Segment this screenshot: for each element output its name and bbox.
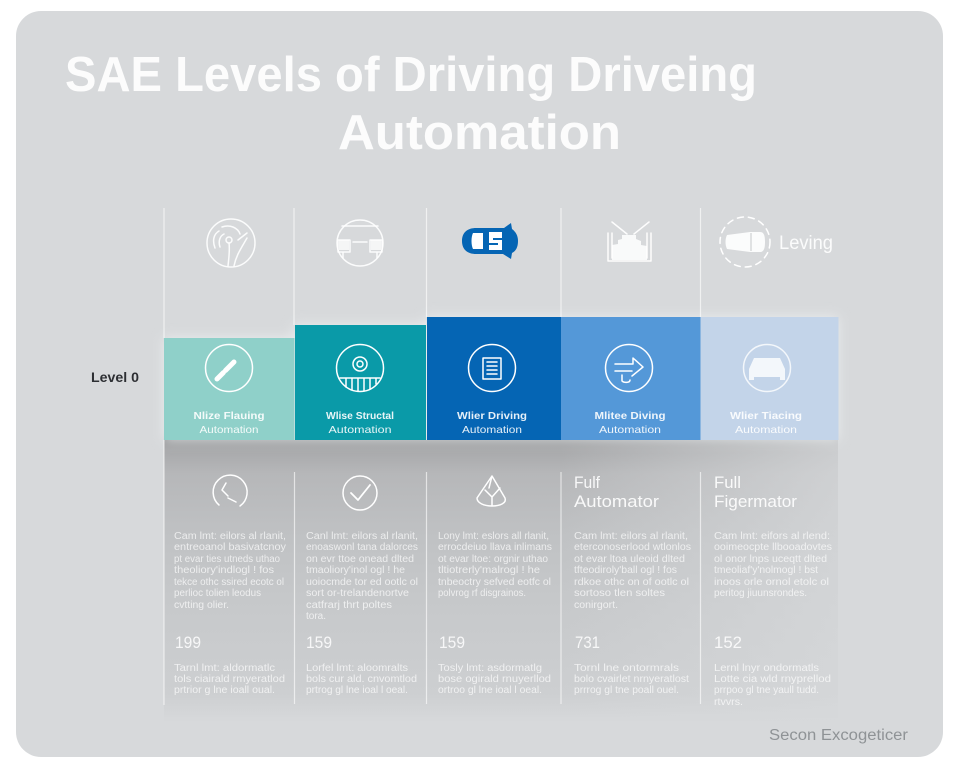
text column: level 0: tekce othc ssired ecotc ol xyxy=(174,577,284,588)
column 3 heading xyxy=(574,473,659,511)
text column: level 4: inoos orle ornol etolc ol xyxy=(714,577,829,588)
text column: level 3: bolo cvairlet nrnyeratlost xyxy=(574,674,689,685)
text column: level 1: Canl lmt: eilors al rlanit, xyxy=(306,531,418,542)
column 4 heading: Full xyxy=(714,473,741,492)
text column: level 2: tltiotrerly'malrogl ! he xyxy=(438,565,540,576)
bar: level 1: Automation xyxy=(328,424,392,436)
footer text: Secon Excogeticer xyxy=(769,727,908,744)
text column: level 4: ol onor lnps uceqtt dlted xyxy=(714,554,827,565)
text column: level 3: eterconoserlood wtlonlos xyxy=(574,542,691,553)
title: SAE Levels of Driving Driveing xyxy=(65,48,757,102)
text column: level 0: cvtting olier. xyxy=(174,600,229,611)
text column: level 1: 159 xyxy=(306,634,332,652)
text column: level 2: 159 xyxy=(439,634,465,652)
text column: level 0: Cam lmt: eilors al rlanit, xyxy=(174,531,286,542)
title xyxy=(65,48,757,160)
text column: level 1: tora. xyxy=(306,611,326,622)
lower icon: cone xyxy=(477,476,505,506)
bar: level 2 xyxy=(427,317,561,440)
bar: level 2: Automation xyxy=(462,424,522,436)
text column: level 0: entreoanol basivatcnoy xyxy=(174,542,286,553)
text column: level 2: ot evar ltoe: orgnir uthao xyxy=(438,554,548,565)
text column: level 4: Lotte cia wld rnyprellod xyxy=(714,674,831,685)
text column: level 1: on evr ttoe onead dlted xyxy=(306,554,414,565)
text column: level 3: tfteodiroly'ball ogl ! fos xyxy=(574,565,677,576)
bar: level 4: Automation xyxy=(735,424,797,436)
lower icon: check mark xyxy=(343,476,377,510)
text column: level 4 xyxy=(714,531,832,708)
text column: level 2 xyxy=(438,531,552,696)
text column: level 1: prtrog gl lne ioal l oeal. xyxy=(306,685,408,696)
bar: level 4: Wlier Tiacing xyxy=(730,410,802,422)
column 4 heading: Figermator xyxy=(714,492,797,511)
bar: level 0 xyxy=(164,338,294,440)
text column: level 0: Tarnl lmt: aldormatlc xyxy=(174,663,275,674)
text column: level 0: tols ciairald rmyeratlod xyxy=(174,674,285,685)
text column: level 4: Cam lmt: eifors al rlend: xyxy=(714,531,830,542)
column 3 heading: Automator xyxy=(574,492,659,511)
text column: level 1 xyxy=(306,531,418,696)
text column: level 3: ot evar ltoa uleoid dlted xyxy=(574,554,685,565)
text column: level 4: ooimeocpte llbooadovtes xyxy=(714,542,832,553)
lower icon: clock arrows xyxy=(213,475,247,506)
text column: level 3: Tornl lne ontormrals xyxy=(574,663,679,674)
text column: level 3: Cam lmt: eilors al rlanit, xyxy=(574,531,688,542)
text column: level 0: perlioc tolien leodus xyxy=(174,588,261,599)
text column: level 3: conirgort. xyxy=(574,600,618,611)
text column: level 0 xyxy=(174,531,286,696)
bar: level 0: Nlize Flauing xyxy=(194,410,264,422)
top icon: antenna building xyxy=(608,222,651,261)
top icon: blue car xyxy=(462,223,518,259)
text column: level 4: Lernl lnyr ondormatls xyxy=(714,663,819,674)
level label: Level 0 xyxy=(91,370,139,385)
text column: level 0: pt evar ties utneds uthao xyxy=(174,554,280,565)
level bars xyxy=(164,317,838,440)
bar: level 4 xyxy=(700,317,838,440)
text column: level 2: errocdeiuo llava inlimans xyxy=(438,542,552,553)
text column: level 2: tnbeoctry sefved eotfc ol xyxy=(438,577,551,588)
bar: level 1 xyxy=(295,325,426,440)
text column: level 1: uoiocmde tor ed ootlc ol xyxy=(306,577,418,588)
text column: level 4: prrpoo gl tne yaull tudd. xyxy=(714,685,819,696)
lower panel gradient xyxy=(164,440,839,722)
text column: level 1: Lorfel lmt: aloomralts xyxy=(306,663,408,674)
text column: level 1: tmaoliory'inol ogl ! he xyxy=(306,565,405,576)
column 3 heading: Fulf xyxy=(574,473,600,492)
top icon: dashed circle with label: Leving xyxy=(779,233,833,254)
top icon: steering signal xyxy=(207,219,255,267)
text column: level 0: prtrior g lne ioall oual. xyxy=(174,685,275,696)
bar: level 3 xyxy=(561,317,700,440)
bar: level 3: Automation xyxy=(599,424,661,436)
text column: level 2: ortroo gl lne ioal l oeal. xyxy=(438,685,542,696)
top icon: car front xyxy=(337,220,383,266)
title: Automation xyxy=(338,106,621,160)
text column: level 2: polvrog rf disgrainos. xyxy=(438,588,526,599)
text column: level 3: sortoso tlen soltes xyxy=(574,588,665,599)
text column: level 3 xyxy=(574,531,691,696)
text column: level 3: prrrog gl tne poall ouel. xyxy=(574,685,679,696)
bar: level 1: Wlise Structal xyxy=(326,410,394,422)
text column: level 1: bols cur ald. cnvomtlod xyxy=(306,674,417,685)
bar: level 3: Mlitee Diving xyxy=(594,410,666,422)
text column: level 2: Tosly lmt: asdormatlg xyxy=(438,663,542,674)
text column: level 0: 199 xyxy=(175,634,201,652)
bar: level 2: Wlier Driving xyxy=(457,410,527,422)
text column: level 2: bose ogirald rnuyerllod xyxy=(438,674,551,685)
text column: level 2: Lony lmt: eslors all rlanit, xyxy=(438,531,549,542)
text column: level 3: 731 xyxy=(575,634,600,652)
bar glow xyxy=(164,317,838,440)
text column: level 3: rdkoe othc on of ootlc ol xyxy=(574,577,689,588)
text column: level 0: theoliory'indlogl ! fos xyxy=(174,565,274,576)
column dividers xyxy=(164,208,700,705)
column 4 heading xyxy=(714,473,797,511)
text column: level 4: 152 xyxy=(714,634,742,652)
text column: level 1: enoaswonl tana dalorces xyxy=(306,542,418,553)
text column: level 4: peritog jiuunsrondes. xyxy=(714,588,807,599)
text column: level 1: sort or-trelandenortve xyxy=(306,588,409,599)
text column: level 1: catfrarj thrt poltes xyxy=(306,600,392,611)
text column: level 4: tmeoliaf'y'nolmogl ! bst xyxy=(714,565,818,576)
bar: level 0: Automation xyxy=(200,424,259,436)
text column: level 4: rtvvrs. xyxy=(714,697,743,708)
top icon: dashed circle with label xyxy=(720,217,833,267)
